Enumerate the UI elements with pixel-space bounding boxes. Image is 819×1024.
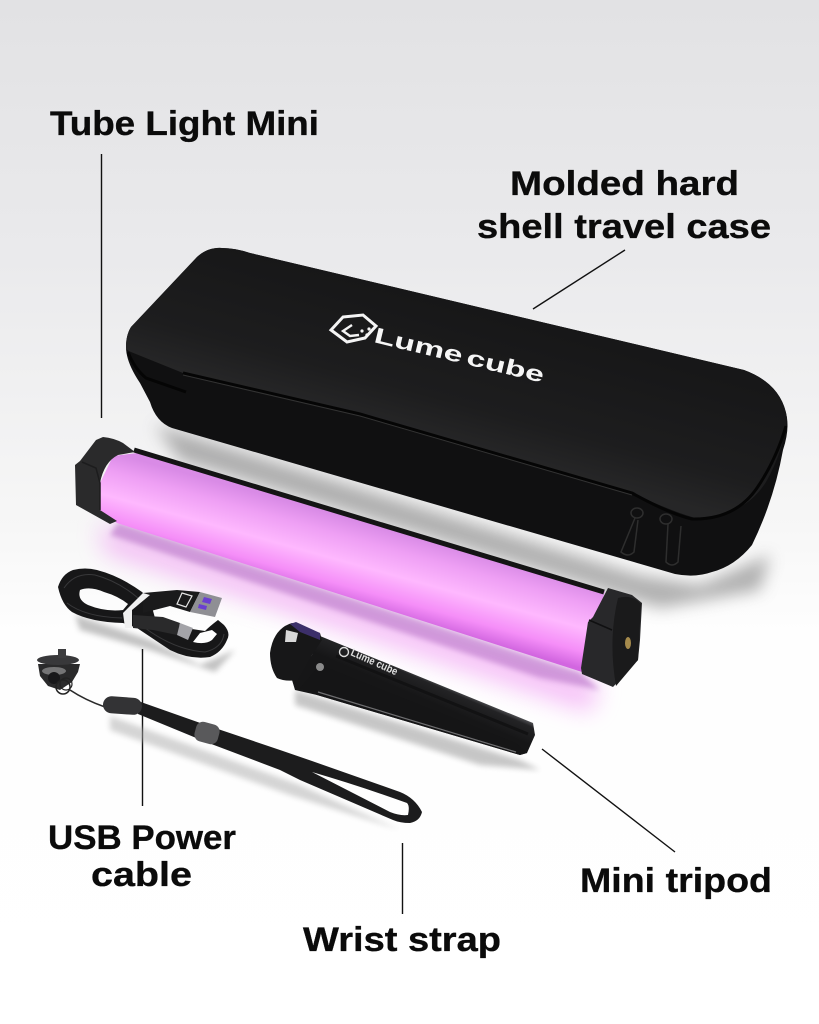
leader line: USB power cable bbox=[142, 649, 144, 806]
case lid bbox=[126, 248, 787, 519]
tripod logo: Lume cube bbox=[349, 647, 399, 678]
tripod screw bbox=[316, 663, 324, 671]
tube left cap bbox=[75, 437, 135, 524]
heading: Molded hard shell travel case bbox=[477, 165, 771, 246]
strap mount bbox=[37, 649, 80, 694]
case zipper pulls bbox=[621, 508, 681, 565]
wrist strap bbox=[37, 649, 422, 830]
mini tripod bbox=[270, 622, 540, 770]
USB-A plug bbox=[143, 590, 200, 613]
case body bbox=[126, 248, 788, 576]
strap slider bbox=[102, 696, 143, 715]
leader line: wrist strap bbox=[402, 843, 404, 914]
case zipper bbox=[128, 352, 786, 519]
tube pink glow bbox=[100, 522, 600, 712]
strap adjuster bbox=[193, 720, 221, 746]
case logo bbox=[331, 315, 547, 387]
heading: Molded hard shell travel case: shell travel case bbox=[477, 208, 771, 246]
cable coils bbox=[58, 568, 228, 658]
case logo: Lume cube bbox=[372, 323, 547, 387]
heading: USB Power cable bbox=[48, 819, 236, 894]
strap cord bbox=[70, 690, 105, 707]
tripod logo bbox=[340, 647, 399, 678]
leader line: Tube Light Mini bbox=[100, 154, 102, 418]
heading: Tube Light Mini: Tube Light Mini bbox=[50, 105, 319, 143]
tripod body bbox=[292, 636, 535, 755]
heading: USB Power cable: cable bbox=[91, 856, 192, 894]
leader line: travel case bbox=[533, 250, 625, 309]
USB power cable bbox=[58, 568, 235, 672]
tube body bbox=[100, 453, 605, 672]
leader line: mini tripod bbox=[542, 749, 675, 852]
cable tie bbox=[123, 593, 150, 628]
heading: Mini tripod: Mini tripod bbox=[580, 862, 772, 900]
tube right cap bbox=[581, 588, 642, 687]
tripod head bbox=[270, 623, 322, 681]
USB-C plug bbox=[133, 615, 180, 635]
tube light bbox=[75, 437, 642, 712]
strap band bbox=[138, 701, 422, 823]
heading: USB Power cable: USB Power bbox=[48, 819, 236, 857]
heading: Wrist strap: Wrist strap bbox=[303, 921, 501, 959]
travel case bbox=[126, 248, 788, 608]
heading: Molded hard shell travel case: Molded hard bbox=[510, 165, 739, 203]
tube connector pin bbox=[625, 637, 631, 649]
